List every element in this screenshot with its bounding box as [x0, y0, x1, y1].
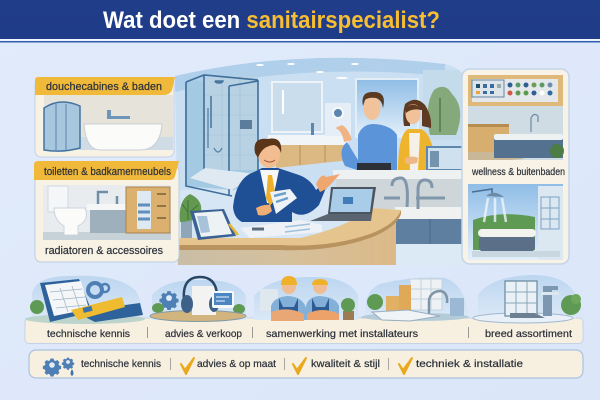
woman in yellow cardigan [398, 100, 432, 170]
heading bar [35, 77, 175, 95]
heading bar [34, 161, 179, 180]
laptop [310, 187, 376, 221]
check: advies [181, 358, 194, 374]
label: samenwerking met installateurs [266, 328, 418, 340]
central showroom scene [175, 58, 462, 265]
icon: two installers [254, 276, 418, 340]
label: breed assortiment [485, 328, 572, 340]
shower cabin [185, 75, 258, 196]
icon: gears with drop [43, 358, 74, 376]
heading text: douchecabines & baden [46, 81, 162, 93]
window with trees [356, 70, 465, 140]
back counter with faucets [333, 170, 462, 244]
image: colour sample board and spa [468, 75, 564, 160]
brochure [270, 189, 297, 214]
man in blue shirt [335, 92, 397, 171]
salesman in blue suit [233, 139, 340, 222]
caption: radiatoren & accessoires [45, 245, 163, 257]
mirror and vanity at the back [268, 82, 350, 168]
summary strip [29, 350, 583, 378]
plant on desk [180, 194, 201, 238]
title banner [0, 0, 600, 42]
wall screen [426, 146, 462, 170]
image: outdoor rain shower and hot tub [468, 184, 563, 260]
icon: technical drawing and level [25, 276, 145, 340]
check: techniek [399, 358, 412, 374]
image: toilet, vanity and cabinet [43, 185, 171, 240]
washing machine [325, 103, 351, 136]
feature strip [25, 275, 583, 344]
label: technische kennis [81, 358, 161, 370]
check: kwaliteit [293, 358, 306, 374]
curved reception desk [178, 208, 401, 265]
label: advies & op maat [197, 358, 276, 370]
caption: wellness & buitenbaden [471, 166, 565, 178]
panel: wellness & buitenbaden [462, 69, 569, 264]
customer couple [335, 92, 436, 171]
heading text: toiletten & badkamermeubels [44, 166, 171, 178]
image: shower and bathtub [44, 95, 173, 151]
label: kwaliteit & stijl [311, 358, 380, 370]
label: technische kennis [47, 328, 130, 340]
catalogue stand [190, 209, 238, 240]
plans on desk [240, 220, 322, 238]
icon: tile window, faucet and plant [473, 275, 581, 340]
icon: materials, tiles and faucet [361, 278, 469, 321]
faucets [384, 178, 445, 209]
label: techniek & installatie [416, 358, 523, 370]
icon: headset and advice [150, 277, 246, 340]
label: advies & verkoop [165, 328, 242, 340]
panel: toiletten & badkamermeubels [34, 161, 179, 262]
panel: douchecabines & baden [35, 77, 175, 157]
title text: Wat doet een sanitairspecialist? [103, 7, 440, 34]
